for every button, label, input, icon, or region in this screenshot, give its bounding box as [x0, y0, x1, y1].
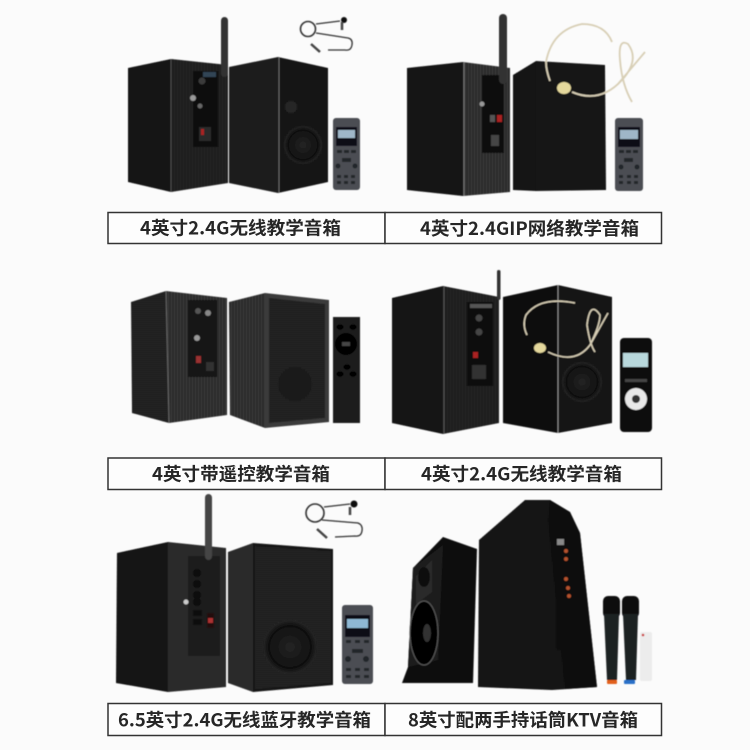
- icon: lapel microphone: [306, 500, 362, 538]
- remote control: [620, 338, 652, 432]
- right speaker front view: [513, 61, 606, 191]
- left speaker rear view: [392, 286, 499, 434]
- antenna: [221, 17, 228, 77]
- remote control: [333, 317, 360, 423]
- small speaker: [402, 537, 477, 683]
- antenna: [497, 270, 500, 300]
- caption: 4-inch with remote: 4英寸带遥控教学音箱: [152, 460, 330, 486]
- antenna: [205, 494, 212, 560]
- icon: headset microphone: [546, 24, 645, 102]
- left speaker rear view: [407, 62, 510, 196]
- right speaker front view: [503, 285, 612, 433]
- panel: 4-inch 2.4G wireless speakers: [128, 17, 360, 193]
- remote control: [615, 118, 643, 191]
- antenna: [499, 14, 507, 84]
- caption: 6.5-inch 2.4G wireless Bluetooth: 6.5英寸2.4G无线蓝牙教学音箱: [118, 706, 371, 732]
- handheld microphone with blue band: [622, 596, 639, 684]
- right speaker front view: [228, 543, 333, 692]
- caption box row 2: [108, 458, 662, 490]
- white remote: [640, 632, 652, 681]
- panel: 4-inch 2.4G wireless speakers, second set: [392, 270, 652, 434]
- remote control: [342, 605, 373, 684]
- left speaker rear view: [131, 291, 227, 423]
- caption: 8-inch KTV: 8英寸配两手持话筒KTV音箱: [408, 706, 638, 732]
- handheld microphone with orange band: [603, 596, 620, 684]
- panel: 4-inch remote-control speakers: [131, 291, 360, 428]
- caption: 4-inch 2.4G wireless: 4英寸2.4G无线教学音箱: [140, 214, 341, 240]
- right speaker front view: [229, 293, 329, 428]
- right speaker front view: [229, 57, 328, 193]
- caption: 4-inch 2.4G wireless, second set: 4英寸2.4G无线教学音箱: [421, 460, 622, 486]
- left speaker rear view: [116, 542, 226, 692]
- icon: headset microphone: [524, 301, 608, 357]
- caption box row 3: [108, 704, 662, 736]
- large speaker: [478, 500, 597, 690]
- panel: 8-inch KTV speakers with two handheld microphones: [402, 500, 652, 690]
- left speaker rear view: [128, 59, 228, 192]
- panel: 6.5-inch 2.4G wireless Bluetooth speakers: [116, 494, 373, 692]
- caption: 4-inch 2.4G IP network: 4英寸2.4GIP网络教学音箱: [420, 215, 639, 241]
- caption box row 1: [108, 212, 662, 244]
- remote control: [333, 118, 360, 190]
- icon: lapel microphone: [300, 17, 352, 52]
- panel: 4-inch 2.4G IP network speakers: [407, 14, 645, 196]
